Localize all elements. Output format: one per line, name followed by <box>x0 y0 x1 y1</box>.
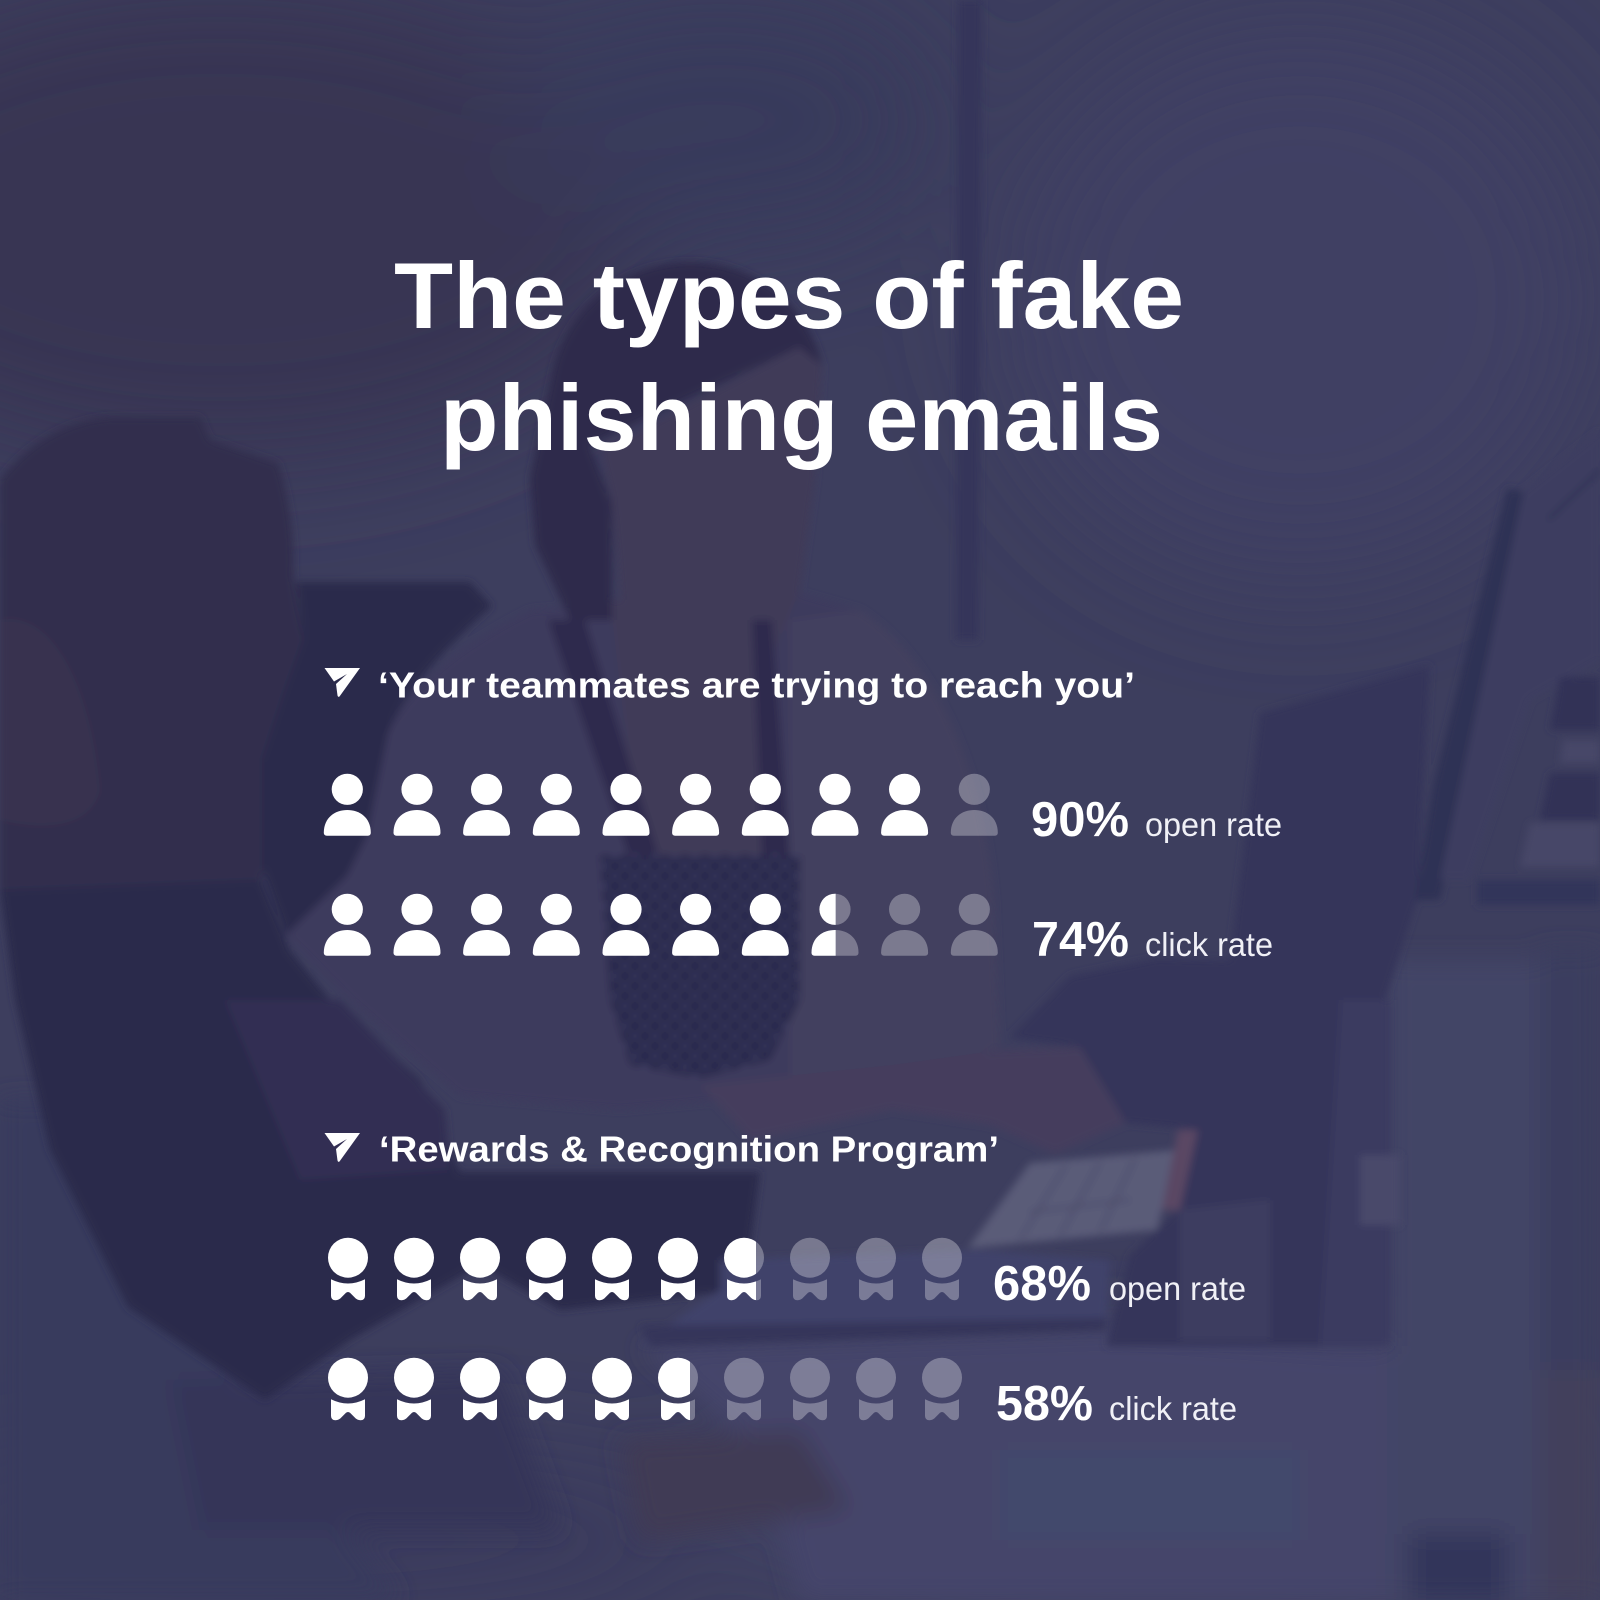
icon: paper plane <box>324 1133 360 1162</box>
sleeve and hand <box>700 1047 1126 1154</box>
stat: 58% click rate <box>996 1377 1237 1431</box>
stat: 68% open rate <box>993 1257 1246 1311</box>
woman's face and neck <box>600 347 822 650</box>
woman's hair and braid <box>530 262 822 620</box>
heading: Your teammates are trying to reach you: ‘Your teammates are trying to reach you’ <box>378 664 1135 706</box>
woman's cardigan <box>286 590 1000 1110</box>
stat: 74% click rate: 74% <box>1032 913 1129 967</box>
foreground desk <box>640 1330 1387 1600</box>
blouse <box>600 855 800 1078</box>
keyboard <box>968 1150 1177 1248</box>
stat: 74% click rate <box>1032 913 1273 967</box>
pictogram: 58% click rate <box>328 1358 962 1420</box>
monitor back and dark mass <box>1009 665 1430 1346</box>
left person's body <box>0 880 760 1400</box>
pictogram: 68% open rate <box>328 1238 962 1300</box>
stat: 90% open rate: open rate <box>1145 806 1282 843</box>
pictogram: 90% open rate <box>324 774 998 836</box>
title <box>394 243 1184 470</box>
left person's face <box>0 619 100 826</box>
stat: 68% open rate: 68% <box>993 1257 1091 1311</box>
stat: 68% open rate: open rate <box>1109 1270 1246 1307</box>
icon: paper plane <box>324 668 360 697</box>
right monitor edge <box>1415 488 1524 900</box>
woman's chest <box>610 600 790 860</box>
desk surface <box>640 1250 1110 1345</box>
left person's head <box>0 417 303 890</box>
title: The types of fake <box>394 243 1184 348</box>
stat: 90% open rate: 90% <box>1031 793 1129 847</box>
blouse straps <box>548 620 660 860</box>
title: phishing emails <box>440 365 1163 470</box>
stat: 58% click rate: 58% <box>996 1377 1093 1431</box>
stat: 58% click rate: click rate <box>1109 1390 1237 1427</box>
chair <box>262 582 492 935</box>
monitor screen top right <box>1440 430 1600 880</box>
section: Your teammates <box>324 664 1282 967</box>
stat: 74% click rate: click rate <box>1145 926 1273 963</box>
back wall vertical dark band <box>956 0 982 640</box>
section: Rewards and Recognition <box>324 1128 1246 1431</box>
stat: 90% open rate <box>1031 793 1282 847</box>
pictogram: 74% click rate <box>324 894 998 956</box>
light column <box>1387 960 1540 1600</box>
heading: Rewards and Recognition Program: ‘Rewards & Recognition Program’ <box>379 1128 999 1170</box>
